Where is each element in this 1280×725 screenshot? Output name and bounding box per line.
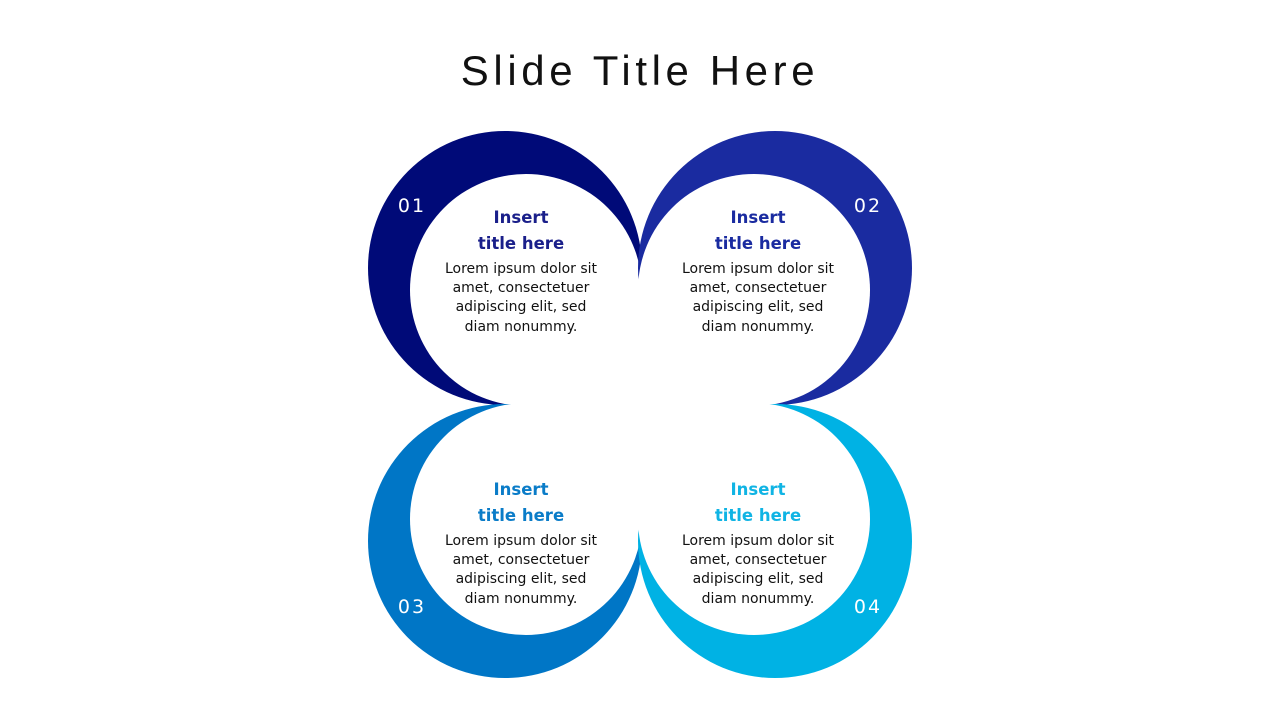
text block 04: Insert xyxy=(731,480,786,499)
text block 03: adipiscing elit, sed xyxy=(456,571,586,587)
text block 03: diam nonummy. xyxy=(465,591,577,607)
number 01: 01 xyxy=(398,195,426,217)
text block 04: amet, consectetuer xyxy=(690,552,827,568)
text block 04: adipiscing elit, sed xyxy=(693,571,823,587)
text block 04 xyxy=(682,480,835,607)
text block 04: diam nonummy. xyxy=(702,591,814,607)
text block 02: diam nonummy. xyxy=(702,319,814,335)
text block 02: Insert xyxy=(731,208,786,227)
text block 04: title here xyxy=(715,506,801,525)
panel: 02 xyxy=(638,131,912,406)
text block 01 xyxy=(445,208,598,335)
text block 03: Insert xyxy=(494,480,549,499)
number 03: 03 xyxy=(398,596,426,618)
text block 01: title here xyxy=(478,234,564,253)
title: Slide Title Here xyxy=(461,47,819,94)
panel: 03 xyxy=(368,403,642,678)
text block 04: Lorem ipsum dolor sit xyxy=(682,533,835,549)
text block 02 xyxy=(682,208,835,335)
text block 03: title here xyxy=(478,506,564,525)
text block 02: adipiscing elit, sed xyxy=(693,299,823,315)
text block 03: amet, consectetuer xyxy=(453,552,590,568)
text block 01: diam nonummy. xyxy=(465,319,577,335)
text block 02: Lorem ipsum dolor sit xyxy=(682,261,835,277)
text block 02: amet, consectetuer xyxy=(690,280,827,296)
text block 03 xyxy=(445,480,598,607)
text block 01: Lorem ipsum dolor sit xyxy=(445,261,598,277)
text block 02: title here xyxy=(715,234,801,253)
panel: 01 xyxy=(368,131,642,406)
panel: 04 xyxy=(638,403,912,678)
text block 01: adipiscing elit, sed xyxy=(456,299,586,315)
text block 03: Lorem ipsum dolor sit xyxy=(445,533,598,549)
number 04: 04 xyxy=(854,596,882,618)
text block 01: Insert xyxy=(494,208,549,227)
number 02: 02 xyxy=(854,195,882,217)
text block 01: amet, consectetuer xyxy=(453,280,590,296)
